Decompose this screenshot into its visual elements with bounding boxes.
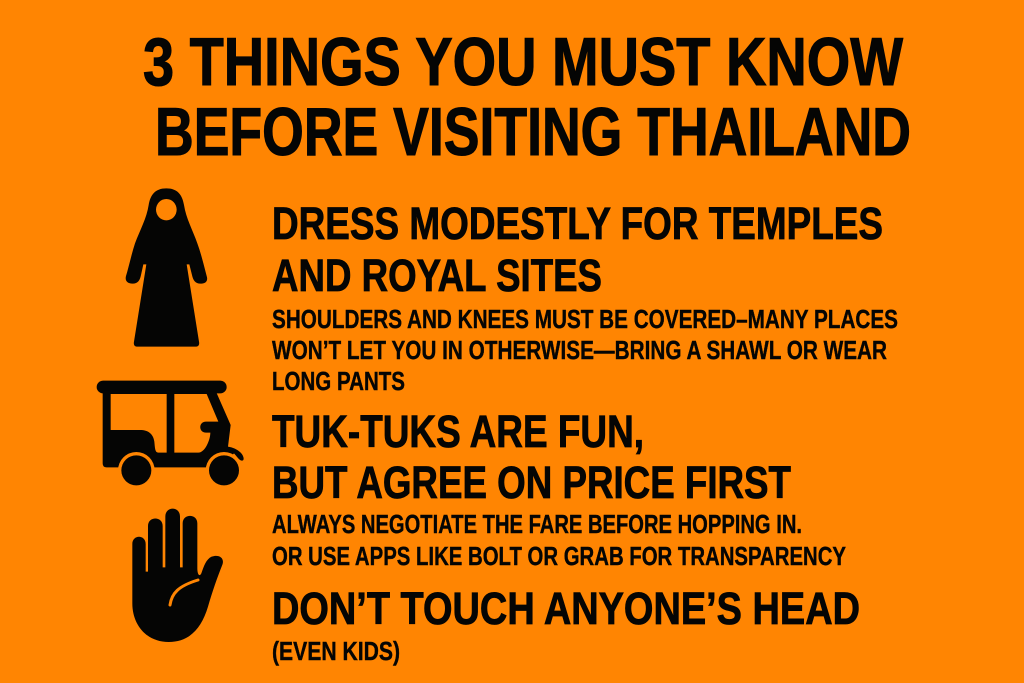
heading: tuk-tuks: BUT AGREE ON PRICE FIRST [272,457,791,508]
text: dress modestly details [272,304,898,396]
heading: tuk-tuks [272,406,791,508]
heading: dress modestly: DRESS MODESTLY FOR TEMPLES [272,198,883,249]
icon: tuk-tuk [97,381,244,489]
heading: tuk-tuks: TUK-TUKS ARE FUN, [272,406,644,457]
heading: don't touch heads: DON’T TOUCH ANYONE’S HEAD [272,583,860,634]
icon: raised hand [132,509,223,642]
text: tuk-tuk details [272,509,846,571]
text: dress modestly details: LONG PANTS [272,366,405,396]
text: dress modestly details: WON’T LET YOU IN OTHERWISE—BRING A SHAWL OR WEAR [272,335,887,365]
heading: dress modestly [272,198,883,301]
icon: modest robe figure [126,188,207,347]
text: even kids: (EVEN KIDS) [272,636,400,666]
heading: dress modestly: AND ROYAL SITES [272,250,602,301]
text: tuk-tuk details: ALWAYS NEGOTIATE THE FARE BEFORE HOPPING IN. [272,509,802,539]
text: tuk-tuk details: OR USE APPS LIKE BOLT OR GRAB FOR TRANSPARENCY [272,541,846,571]
title [143,24,911,170]
